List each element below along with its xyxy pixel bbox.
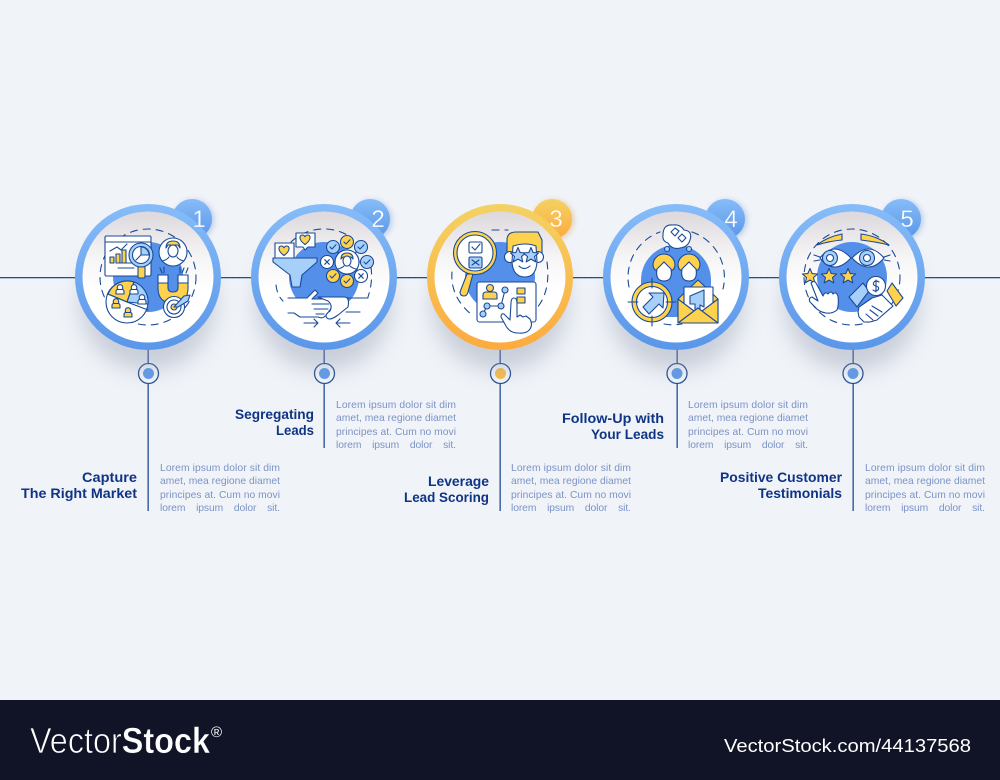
body text 1 <box>160 463 280 514</box>
connector line 3 <box>500 340 501 511</box>
icon: follow-up with your leads <box>628 225 724 326</box>
handshake with coin <box>849 276 903 322</box>
body text 3: lorem ipsum dolor sit. <box>511 503 631 514</box>
footer logo: ® <box>211 724 222 741</box>
heading 3: Leverage <box>428 473 489 489</box>
body text 4 <box>688 400 808 451</box>
heading 3: Lead Scoring <box>404 489 489 505</box>
funnel <box>273 258 317 287</box>
stars <box>802 268 856 283</box>
connector line 5 <box>852 340 854 511</box>
magnet <box>158 267 188 303</box>
chain bubble <box>663 225 691 248</box>
heading 1: The Right Market <box>21 485 137 501</box>
icon: segregating leads <box>273 229 374 327</box>
circle badge 1 <box>75 199 221 371</box>
eyebrows <box>817 234 889 245</box>
target <box>164 295 190 318</box>
body text 2 <box>336 400 456 451</box>
step 4 <box>562 199 808 451</box>
heading 2: Segregating <box>235 406 314 422</box>
dashboard <box>105 236 151 276</box>
heading 1 <box>21 469 137 501</box>
connector line 2 <box>324 340 325 448</box>
body text 2: amet, mea regione diamet <box>336 413 456 424</box>
marker 1 <box>138 364 158 384</box>
pie chart <box>106 281 148 323</box>
connector line 1 <box>148 340 149 511</box>
body text 5: amet, mea regione diamet <box>865 476 985 487</box>
contacts <box>320 236 374 288</box>
circle badge 3: 3 <box>549 206 563 233</box>
timeline axis <box>0 277 1000 278</box>
heading 1: Capture <box>82 469 137 485</box>
arrows <box>304 319 350 327</box>
body text 4: amet, mea regione diamet <box>688 413 808 424</box>
step 3 <box>404 199 631 514</box>
face with star eyes <box>504 232 544 277</box>
body text 4: lorem ipsum dolor sit. <box>688 440 808 451</box>
body text 4: Lorem ipsum dolor sit dim <box>688 400 808 411</box>
marker 2 <box>314 364 334 384</box>
step 5 <box>720 199 985 514</box>
step 1 <box>21 199 280 514</box>
circle badge 2: 2 <box>371 206 385 233</box>
marker 5 <box>843 364 863 384</box>
magnifier <box>129 243 153 278</box>
hands <box>288 290 368 319</box>
crosshair target <box>628 278 676 326</box>
circle badge 5 <box>779 199 925 371</box>
circle badge 2 <box>251 199 397 371</box>
envelope with megaphone <box>678 280 718 323</box>
heading 4: Follow-Up with <box>562 410 664 426</box>
body text 5: Lorem ipsum dolor sit dim <box>865 463 985 474</box>
footer logo: VectorStock <box>30 720 211 761</box>
heading 3 <box>404 473 489 505</box>
body text 1: lorem ipsum dolor sit. <box>160 503 280 514</box>
circle badge 4 <box>603 199 749 371</box>
heading 5 <box>720 469 843 501</box>
body text 5 <box>865 463 985 514</box>
body text 3: amet, mea regione diamet <box>511 476 631 487</box>
step 2 <box>235 199 456 451</box>
body text 5: principes at. Cum no movi <box>865 490 985 501</box>
body text 1: principes at. Cum no movi <box>160 490 280 501</box>
heading 2 <box>235 406 314 438</box>
magnifier with checkboxes <box>454 232 496 296</box>
heading 5: Positive Customer <box>720 469 843 485</box>
body text 2: principes at. Cum no movi <box>336 427 456 438</box>
pointing hand <box>501 298 532 333</box>
body text 2: lorem ipsum dolor sit. <box>336 440 456 451</box>
marker 4 <box>667 364 687 384</box>
body text 3 <box>511 463 631 514</box>
heading 2: Leads <box>276 422 314 438</box>
circle badge 5: 5 <box>900 206 914 233</box>
footer bar <box>0 700 1000 780</box>
person <box>159 238 187 266</box>
footer image id: VectorStock.com/44137568 <box>724 736 971 756</box>
hearts <box>275 233 315 258</box>
heads <box>653 254 700 281</box>
marker 3 <box>490 364 510 384</box>
tablet with flowchart <box>477 282 536 322</box>
circle badge 4: 4 <box>724 206 738 233</box>
connector line 4 <box>676 340 678 448</box>
heading 4 <box>562 410 664 442</box>
body text 3: principes at. Cum no movi <box>511 490 631 501</box>
body text 3: Lorem ipsum dolor sit dim <box>511 463 631 474</box>
heading 5: Testimonials <box>758 485 842 501</box>
icon: positive customer testimonials <box>802 229 903 325</box>
body text 5: lorem ipsum dolor sit. <box>865 503 985 514</box>
pointing hand <box>809 282 838 313</box>
body text 1: Lorem ipsum dolor sit dim <box>160 463 280 474</box>
body text 2: Lorem ipsum dolor sit dim <box>336 400 456 411</box>
circle badge 1: 1 <box>192 206 206 233</box>
heading 4: Your Leads <box>591 426 664 442</box>
icon: leverage lead scoring <box>452 230 548 333</box>
icon: capture the right market <box>100 229 196 325</box>
eyes <box>814 249 890 267</box>
circle badge 3 <box>427 199 574 371</box>
body text 4: principes at. Cum no movi <box>688 427 808 438</box>
body text 1: amet, mea regione diamet <box>160 476 280 487</box>
dots <box>664 246 692 252</box>
